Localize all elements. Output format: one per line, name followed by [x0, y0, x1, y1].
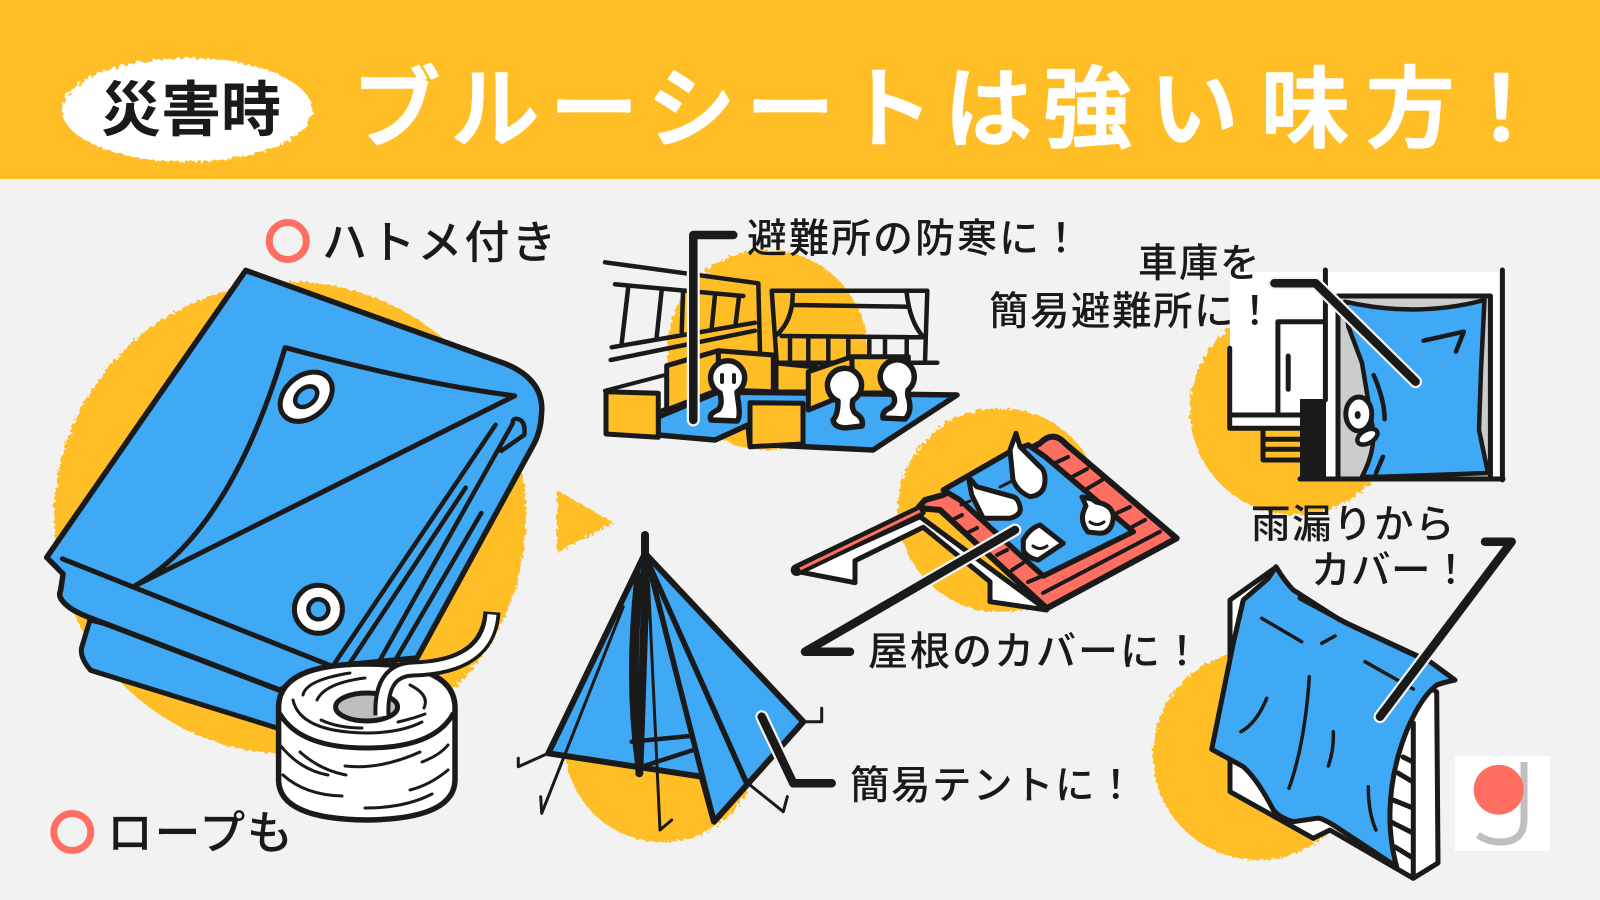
fold triangle: [134, 348, 515, 586]
white garage wall: [1230, 272, 1503, 480]
label: shelter cold protection: 避難所の防寒に！: [747, 217, 1083, 261]
evacuee person middle: [827, 368, 862, 428]
label: garage line 1: 車庫を: [1138, 242, 1261, 286]
label: leak line 2: カバー！: [1311, 549, 1471, 593]
label: roof cover: 屋根のカバーに！: [868, 630, 1204, 674]
tent sheet: [548, 553, 803, 822]
house edge and hatch: [1391, 723, 1413, 878]
peeking person: [1346, 397, 1380, 448]
sandbag top: [1010, 433, 1045, 497]
panel: roof cover: [797, 408, 1177, 652]
rope coil: [279, 664, 455, 820]
sheet upper dark edge: [1300, 598, 1425, 660]
gable walls: [798, 517, 1047, 610]
leader: roof: [805, 530, 1015, 652]
yellow blob behind house: [1153, 650, 1363, 860]
evacuee person right: [880, 360, 914, 419]
evacuee person left: [710, 361, 745, 421]
grommet upper: [270, 362, 342, 431]
tile lines: [952, 457, 1160, 593]
garage frame: [1300, 270, 1503, 480]
label: tent: 簡易テントに！: [850, 764, 1137, 808]
leader: garage: [1274, 283, 1416, 382]
blue sheet floor: [658, 392, 957, 450]
title: ブルーシートは強い味方！: [352, 60, 1556, 159]
ring icon: rope too: [54, 814, 91, 850]
tarp body: [47, 270, 542, 690]
ring icon: with grommets: [269, 222, 306, 260]
badge: disaster time: 災害時: [101, 77, 281, 144]
sandbag left: [968, 477, 1020, 518]
yellow blob behind roof: [898, 408, 1102, 612]
fold lines: [333, 419, 525, 666]
partitions: [605, 351, 908, 447]
label: rope too: ロープも: [107, 807, 294, 859]
blue sheet over house: [1212, 567, 1455, 867]
panel: tarp with grommets and rope: [47, 270, 542, 820]
blue curtain sheet: [1345, 300, 1488, 477]
school gym building: [605, 262, 937, 363]
fold front edge: [62, 559, 331, 666]
guy ropes: [518, 580, 822, 830]
center pole: [639, 535, 645, 773]
roof red tiles: [918, 437, 1177, 608]
leader: shelter: [693, 235, 733, 420]
arrow: [557, 490, 613, 553]
tent folds: [632, 562, 747, 822]
curtain creases: [1374, 332, 1464, 473]
label: leak line 1: 雨漏りから: [1251, 503, 1456, 547]
grommet lower: [294, 585, 342, 633]
leader: tent: [762, 717, 832, 783]
yellow blob behind tent: [565, 648, 759, 842]
sandbag right: [1082, 497, 1113, 533]
sandbag center: [1023, 525, 1063, 560]
panel: tent: [518, 535, 832, 842]
rope strand: [382, 612, 492, 716]
label: with grommets: ハトメ付き: [322, 217, 558, 268]
blue roof sheet: [943, 445, 1133, 576]
steps and door: [1230, 322, 1326, 480]
header band: [0, 0, 1600, 179]
tarp lower layer: [81, 620, 340, 732]
eave strip: [797, 511, 920, 570]
logo: [1455, 756, 1550, 851]
panel: shelter: [605, 235, 957, 450]
yellow blob behind shelter: [667, 250, 867, 450]
tent inner lines: [632, 575, 693, 770]
panel: leak cover: [1153, 542, 1512, 878]
house body: [1230, 568, 1438, 878]
small marks: [961, 482, 1104, 548]
label: garage line 2: 簡易避難所に！: [989, 290, 1276, 334]
panel: garage: [1190, 270, 1503, 515]
yellow blob behind tarp: [54, 282, 526, 754]
leader: leak: [1380, 542, 1512, 717]
yellow blob behind garage: [1190, 305, 1400, 515]
sheet creases: [1241, 618, 1413, 830]
badge: disaster time: [62, 58, 312, 162]
